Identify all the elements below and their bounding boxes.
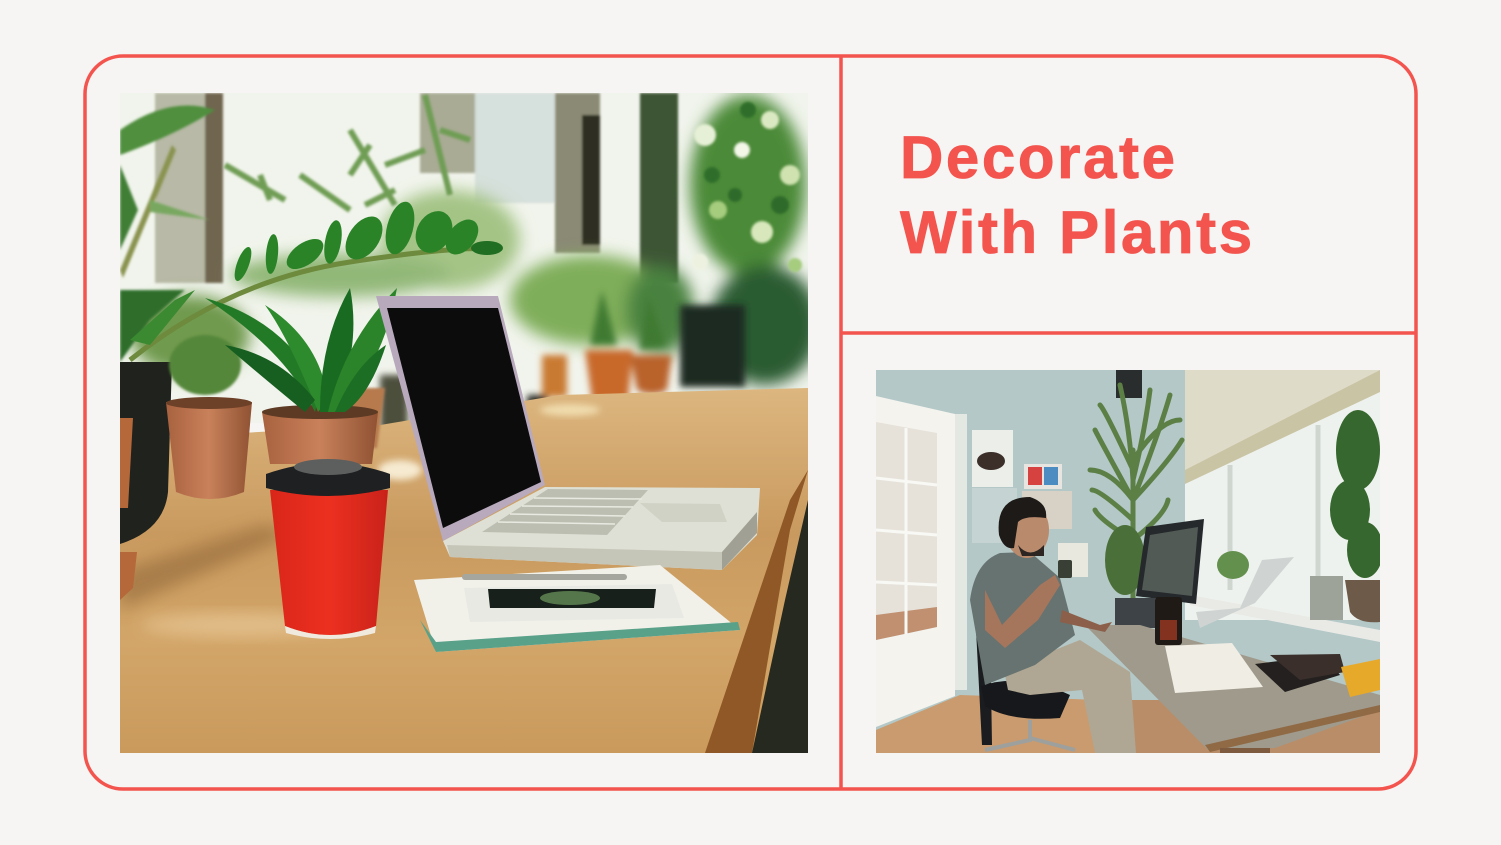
red coffee cup	[266, 459, 390, 639]
title: Decorate	[900, 124, 1178, 191]
desk	[1085, 625, 1380, 753]
wooden desk	[120, 388, 808, 753]
window plants	[1090, 385, 1383, 622]
seated man with mug	[970, 497, 1136, 753]
room walls and floor	[876, 370, 1380, 753]
monitor	[1115, 519, 1204, 628]
title: With Plants	[900, 199, 1255, 266]
notebook and phone	[414, 565, 740, 652]
title	[900, 124, 1255, 266]
white door	[876, 396, 967, 727]
photo: man at a desk with a mug	[876, 370, 1380, 753]
wall posters	[972, 370, 1142, 577]
window and blind	[1185, 370, 1380, 642]
laptop	[376, 296, 760, 570]
desk items	[1155, 557, 1380, 697]
photo: laptop and plants on a wooden desk	[120, 93, 808, 753]
potted plants	[120, 106, 503, 600]
background window and greenery	[120, 93, 820, 453]
